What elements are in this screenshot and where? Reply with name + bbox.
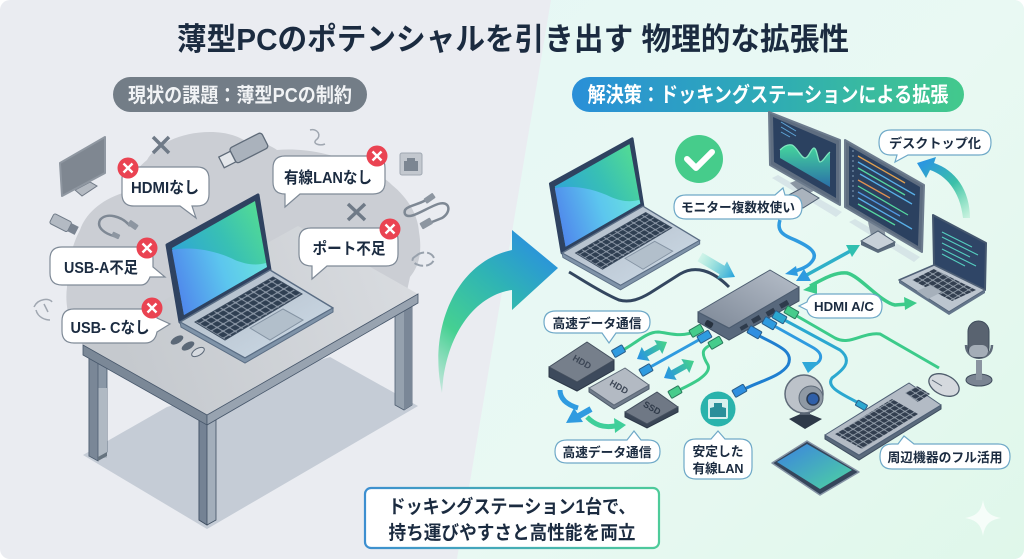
callout: multi monitor (674, 188, 802, 219)
callout: high-speed top (544, 311, 650, 343)
callout: HDMI (799, 294, 882, 318)
gray cloud backdrop (66, 132, 420, 345)
icon: microphone (966, 321, 992, 386)
HDD light (589, 368, 649, 409)
SSD: SSD (641, 399, 663, 417)
callout: USB-C none (62, 298, 170, 343)
monitor: chart (769, 112, 842, 217)
arrow: monitor 2 double (796, 245, 860, 281)
floor shadow (83, 357, 418, 529)
callout: wired LAN none: 有線LANなし (284, 168, 372, 187)
callout: multi monitor: モニター複数枚使い (681, 200, 795, 215)
callout: stable LAN (684, 431, 752, 479)
icon: keyboard (825, 383, 941, 460)
arrow: laptop double (803, 273, 917, 310)
laptop: thin PC (167, 195, 333, 363)
callout: high-speed bottom (555, 431, 660, 463)
callout: stable LAN: 有線LAN (692, 461, 744, 476)
callout: peripherals: 周辺機器のフル活用 (888, 450, 1002, 465)
arrow: storage green (587, 417, 626, 433)
cable: monitor 1 (779, 220, 814, 276)
icon: tablet (772, 441, 859, 495)
icon: doodle top (310, 130, 325, 145)
HDD dark (549, 342, 614, 391)
icon: usb stick top (217, 132, 269, 170)
icon: usb stick left (49, 213, 79, 236)
arrow: storage double 2 (664, 359, 694, 380)
arrow: desktop (917, 157, 970, 218)
callout: bottom summary: 持ち運びやすさと高性能を両立 (388, 522, 636, 544)
icon: check (675, 135, 723, 183)
dock cable from laptop (569, 270, 729, 301)
callout: desktop: デスクトップ化 (889, 136, 981, 151)
heading: solution: 解決策：ドッキングステーションによる拡張 (588, 83, 948, 107)
icon: cable right (405, 193, 448, 229)
callout: wired LAN none (273, 146, 388, 207)
icon: cable left (99, 216, 139, 239)
HDD light: HDD (608, 378, 630, 396)
callout: not enough ports (299, 218, 400, 279)
callout: high-speed top: 高速データ通信 (552, 316, 642, 331)
callout: HDMI: HDMI A/C (814, 299, 875, 314)
callout: high-speed bottom: 高速データ通信 (562, 445, 652, 460)
heading: problems: 現状の課題：薄型PCの制約 (128, 84, 352, 107)
callout: USB-A shortage: USB-A不足 (64, 260, 138, 277)
icon: gray x 2 (348, 204, 365, 220)
cables: storage (611, 324, 723, 398)
table (83, 226, 418, 525)
icon: gray x 1 (153, 137, 169, 153)
icon: lan port (400, 153, 422, 175)
callout: bottom summary: ドッキングステーション1台で、 (388, 495, 636, 518)
arrow: storage blue (560, 390, 591, 423)
panel: solution (544, 77, 1010, 495)
icon: crossed out monitor (60, 137, 105, 196)
table ports (169, 333, 206, 359)
SSD (625, 392, 678, 428)
icon: sync (413, 252, 434, 266)
arrow: problem to solution (438, 230, 558, 393)
laptop: code (899, 215, 986, 315)
panel: current problems (34, 77, 448, 529)
icon: wired LAN (700, 392, 736, 426)
arrow: laptop to dock (698, 253, 735, 279)
title: 薄型PCのポテンシャルを引き出す 物理的な拡張性 (177, 22, 849, 57)
heading: problems (113, 77, 367, 112)
callout: stable LAN: 安定した (692, 444, 744, 459)
icon: doodle left (34, 299, 52, 320)
icon: webcam (785, 375, 823, 429)
heading: solution (572, 77, 964, 112)
callout: bottom summary (365, 488, 659, 548)
cables: peripherals (732, 306, 939, 411)
HDD dark: HDD (571, 353, 593, 371)
callout: HDMI none: HDMIなし (131, 179, 199, 197)
callout: peripherals (880, 436, 1010, 469)
icon: mouse (925, 369, 963, 401)
callout: USB-A shortage (50, 238, 165, 285)
callout: USB-C none: USB- Cなし (70, 319, 150, 337)
callout: desktop (879, 130, 991, 162)
icon: sparkle (965, 500, 1001, 536)
arrow: storage double 1 (637, 340, 667, 361)
callout: not enough ports: ポート不足 (312, 240, 386, 258)
monitor: code (845, 140, 924, 262)
callout: HDMI none (118, 158, 209, 218)
laptop: connected PC (550, 139, 700, 290)
dock (698, 270, 799, 340)
